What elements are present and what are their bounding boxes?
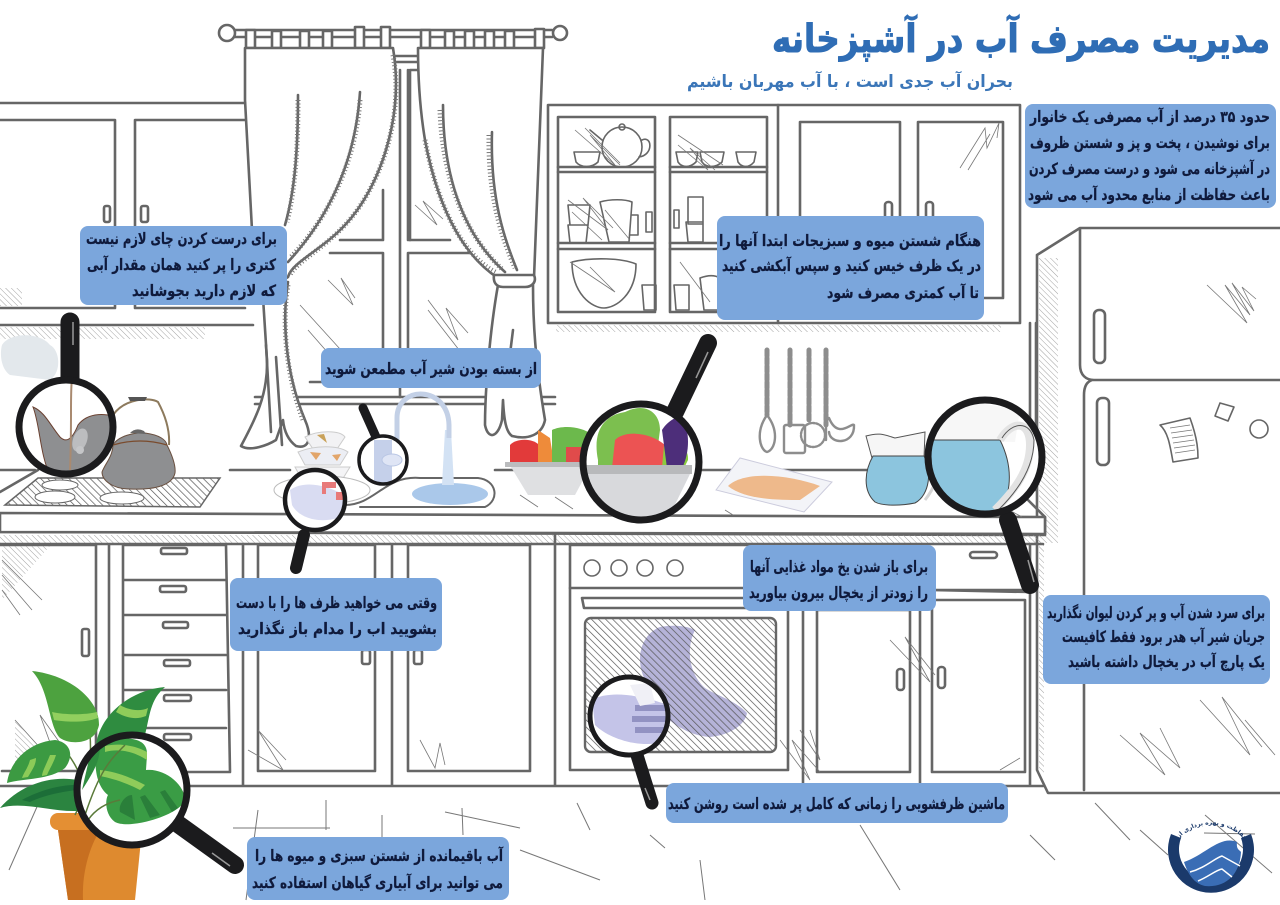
callout: intro text — [1025, 104, 1276, 208]
callout: faucet tip: از بسته بودن شیر آب مطمعن شوید — [325, 359, 537, 378]
callout: kettle tip: برای درست کردن چای لازم نیست — [86, 230, 277, 249]
callout: watering plants tip — [247, 837, 509, 900]
magnifier: kettle — [19, 322, 120, 475]
hanging utensils — [760, 350, 854, 453]
left wall cabinets — [0, 103, 253, 339]
magnifier: vegetables bowl — [580, 343, 708, 525]
vegetables bowl — [505, 427, 595, 495]
magnifier: plant — [77, 735, 235, 866]
plant pot — [50, 813, 142, 900]
magnifier: water jug — [928, 400, 1042, 585]
base cabinets and floor line — [0, 535, 1043, 786]
callout: cold water tip — [1043, 595, 1270, 684]
callout: hand washing dishes tip — [230, 578, 442, 651]
oven — [570, 545, 788, 770]
floor tile lines — [9, 800, 1272, 900]
right wall cabinets with dishes — [548, 105, 1020, 332]
dishes and plates — [274, 432, 370, 504]
magnifier: faucet — [359, 408, 407, 485]
steam — [1, 335, 58, 380]
callout: kettle tip — [80, 226, 287, 305]
backsplash and counter — [0, 323, 1045, 545]
plant leaves — [0, 671, 165, 815]
callout: washing vegetables tip: تا آب کمتری مصرف شود — [827, 283, 979, 302]
magnifier: dishwasher plates — [590, 677, 668, 803]
fridge — [1037, 228, 1280, 793]
callout: kettle tip: که لازم دارید بجوشانید — [132, 282, 277, 300]
callout: thawing food tip: برای باز شدن یخ مواد غذایی آنها — [750, 557, 928, 576]
sink with faucet — [345, 394, 495, 507]
callout: intro text: حدود ۳۵ درصد از آب مصرفی یک خانوار — [1029, 107, 1270, 126]
stove — [0, 470, 220, 507]
callout: faucet tip — [321, 348, 541, 388]
sketch hatching under counter items — [520, 495, 1022, 519]
callout: thawing food tip — [743, 545, 936, 611]
right curtain — [418, 48, 545, 437]
kettle — [102, 397, 175, 489]
water jug — [866, 432, 938, 505]
callout: washing vegetables tip: در یک ظرف خیس کنید و سپس آبکشی کنید — [722, 256, 981, 276]
callout: dishwasher tip — [666, 783, 1008, 823]
logo: دفتر حفاظت و بهره برداری از آب — [1178, 822, 1245, 838]
callout: washing vegetables tip — [717, 216, 984, 320]
callout: hand washing dishes tip: بشویید اب را مدام باز نگذارید — [238, 619, 437, 638]
tray with chicken — [716, 458, 832, 512]
window — [255, 56, 555, 404]
callout: watering plants tip: می توانید برای آبیاری گیاهان استفاده کنید — [252, 873, 503, 892]
left curtain — [241, 48, 396, 448]
callout: kettle tip: کتری را پر کنید همان مقدار آبی — [87, 255, 277, 275]
callout: hand washing dishes tip: وقتی می خواهید ظرف ها را با دست — [236, 594, 437, 612]
callout: dishwasher tip: ماشین ظرفشویی را زمانی که کامل پر شده است روشن کنید — [668, 795, 1005, 814]
magnifier: plates — [285, 470, 345, 568]
callout: watering plants tip: آب باقیمانده از شستن سبزی و میوه ها را — [255, 846, 504, 865]
callout: washing vegetables tip: هنگام شستن میوه و سبزیجات ابتدا آنها را — [719, 231, 981, 250]
callout: thawing food tip: را زودتر از یخچال بیرون بیاورید — [749, 584, 928, 603]
subtitle: بحران آب جدی است ، با آب مهربان باشیم — [687, 70, 1013, 92]
curtain rod — [219, 25, 567, 48]
